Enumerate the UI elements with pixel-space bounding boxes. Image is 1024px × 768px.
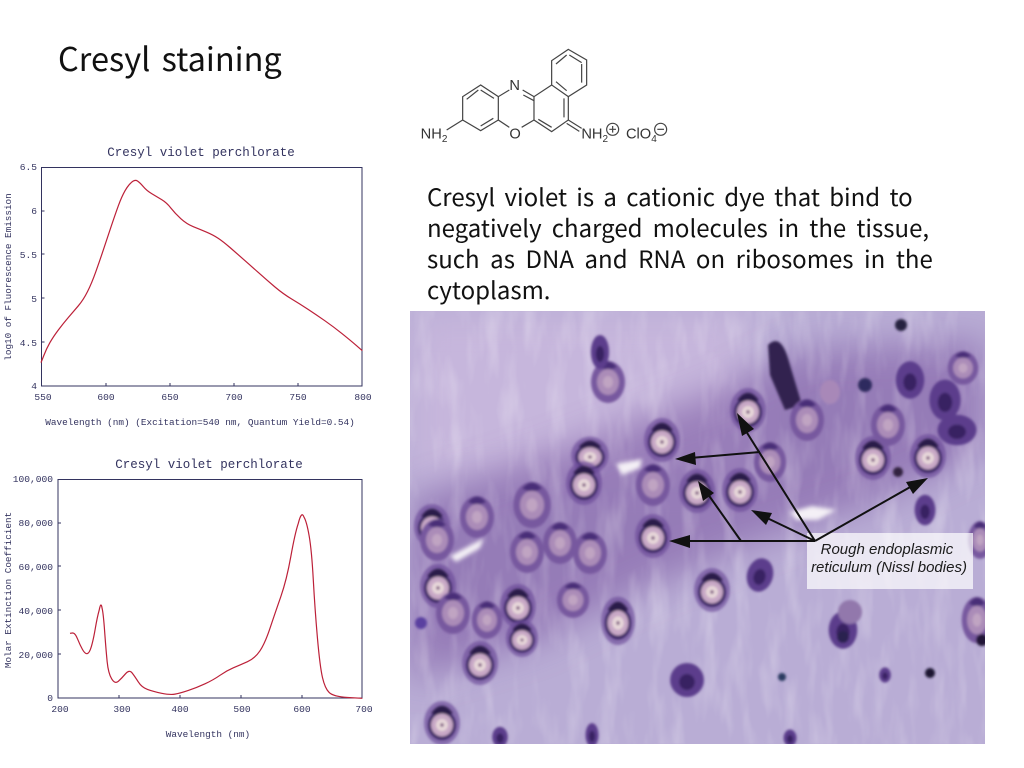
chemical structure: cresyl violet perchlorate: O bbox=[509, 126, 521, 142]
axis tick labels: extinction: 500 bbox=[233, 704, 251, 715]
axis tick labels: emission: 6.5 bbox=[20, 162, 37, 173]
axis tick labels: extinction: 300 bbox=[113, 704, 131, 715]
chemical structure: cresyl violet perchlorate: 2 bbox=[442, 134, 448, 145]
description text: such as DNA and RNA on ribosomes in the bbox=[427, 240, 933, 275]
x axis label: extinction: Wavelength (nm) bbox=[166, 729, 250, 740]
chart title: emission: Cresyl violet perchlorate bbox=[107, 146, 295, 160]
x axis label: emission: Wavelength (nm) (Excitation=540 nm, Quantum Yield=0.54) bbox=[45, 417, 355, 428]
axis tick labels: extinction: 400 bbox=[171, 704, 189, 715]
micrograph panel: stained neurons bbox=[410, 311, 992, 747]
chemical structure: cresyl violet perchlorate: 2 bbox=[602, 134, 608, 145]
title: Cresyl staining bbox=[58, 34, 282, 81]
axis tick labels: extinction: 60,000 bbox=[18, 562, 53, 573]
y axis label: emission: log10 of Fluorescence Emission bbox=[3, 193, 14, 361]
axis tick labels: emission: 650 bbox=[161, 392, 179, 403]
plot frame and ticks: extinction bbox=[58, 480, 362, 698]
emission curve bbox=[41, 180, 362, 363]
axis tick labels: extinction: 20,000 bbox=[18, 650, 53, 661]
chemical structure: cresyl violet perchlorate: NH bbox=[581, 127, 602, 143]
chemical structure: cresyl violet perchlorate: 4 bbox=[651, 134, 657, 145]
chart: molar extinction spectrum bbox=[3, 458, 373, 740]
axis tick labels: emission: 800 bbox=[354, 392, 372, 403]
chart title: extinction: Cresyl violet perchlorate bbox=[115, 458, 303, 472]
extinction curve bbox=[70, 515, 362, 698]
callout label: Rough endoplasmic reticulum: reticulum (Nissl bodies) bbox=[811, 559, 967, 576]
axis tick labels: emission: 5 bbox=[31, 294, 37, 305]
description text: cytoplasm. bbox=[427, 271, 550, 306]
plot frame and ticks: emission bbox=[42, 168, 362, 386]
chemical structure: cresyl violet perchlorate bbox=[421, 49, 667, 145]
description text: Cresyl violet is a cationic dye that bind to bbox=[427, 178, 913, 213]
chemical structure: cresyl violet perchlorate: NH bbox=[421, 127, 442, 143]
y axis label: extinction: Molar Extinction Coefficient bbox=[3, 512, 14, 668]
axis tick labels: extinction: 0 bbox=[47, 693, 53, 704]
axis tick labels: extinction: 100,000 bbox=[13, 474, 53, 485]
axis tick labels: extinction: 80,000 bbox=[18, 518, 53, 529]
description text: negatively charged molecules in the tissue, bbox=[427, 209, 929, 244]
axis tick labels: emission: 700 bbox=[225, 392, 243, 403]
axis tick labels: emission bbox=[20, 162, 372, 403]
chemical structure: cresyl violet perchlorate: N bbox=[509, 78, 520, 94]
axis tick labels: emission: 6 bbox=[31, 206, 37, 217]
axis tick labels: extinction: 200 bbox=[51, 704, 69, 715]
callout label: Rough endoplasmic reticulum: Rough endoplasmic bbox=[821, 541, 954, 558]
axis tick labels: extinction: 600 bbox=[293, 704, 311, 715]
chart: fluorescence emission spectrum bbox=[3, 146, 372, 428]
axis tick labels: emission: 750 bbox=[289, 392, 307, 403]
callout label background bbox=[807, 533, 973, 589]
axis tick labels: extinction: 40,000 bbox=[18, 606, 53, 617]
axis tick labels: emission: 600 bbox=[97, 392, 115, 403]
arrows to Nissl bodies bbox=[669, 413, 928, 548]
axis tick labels: emission: 4 bbox=[31, 381, 37, 392]
axis tick labels: extinction bbox=[13, 474, 373, 715]
axis tick labels: extinction: 700 bbox=[355, 704, 373, 715]
chemical structure: cresyl violet perchlorate: ClO bbox=[626, 127, 651, 143]
axis tick labels: emission: 550 bbox=[34, 392, 52, 403]
axis tick labels: emission: 4.5 bbox=[20, 338, 37, 349]
axis tick labels: emission: 5.5 bbox=[20, 250, 37, 261]
